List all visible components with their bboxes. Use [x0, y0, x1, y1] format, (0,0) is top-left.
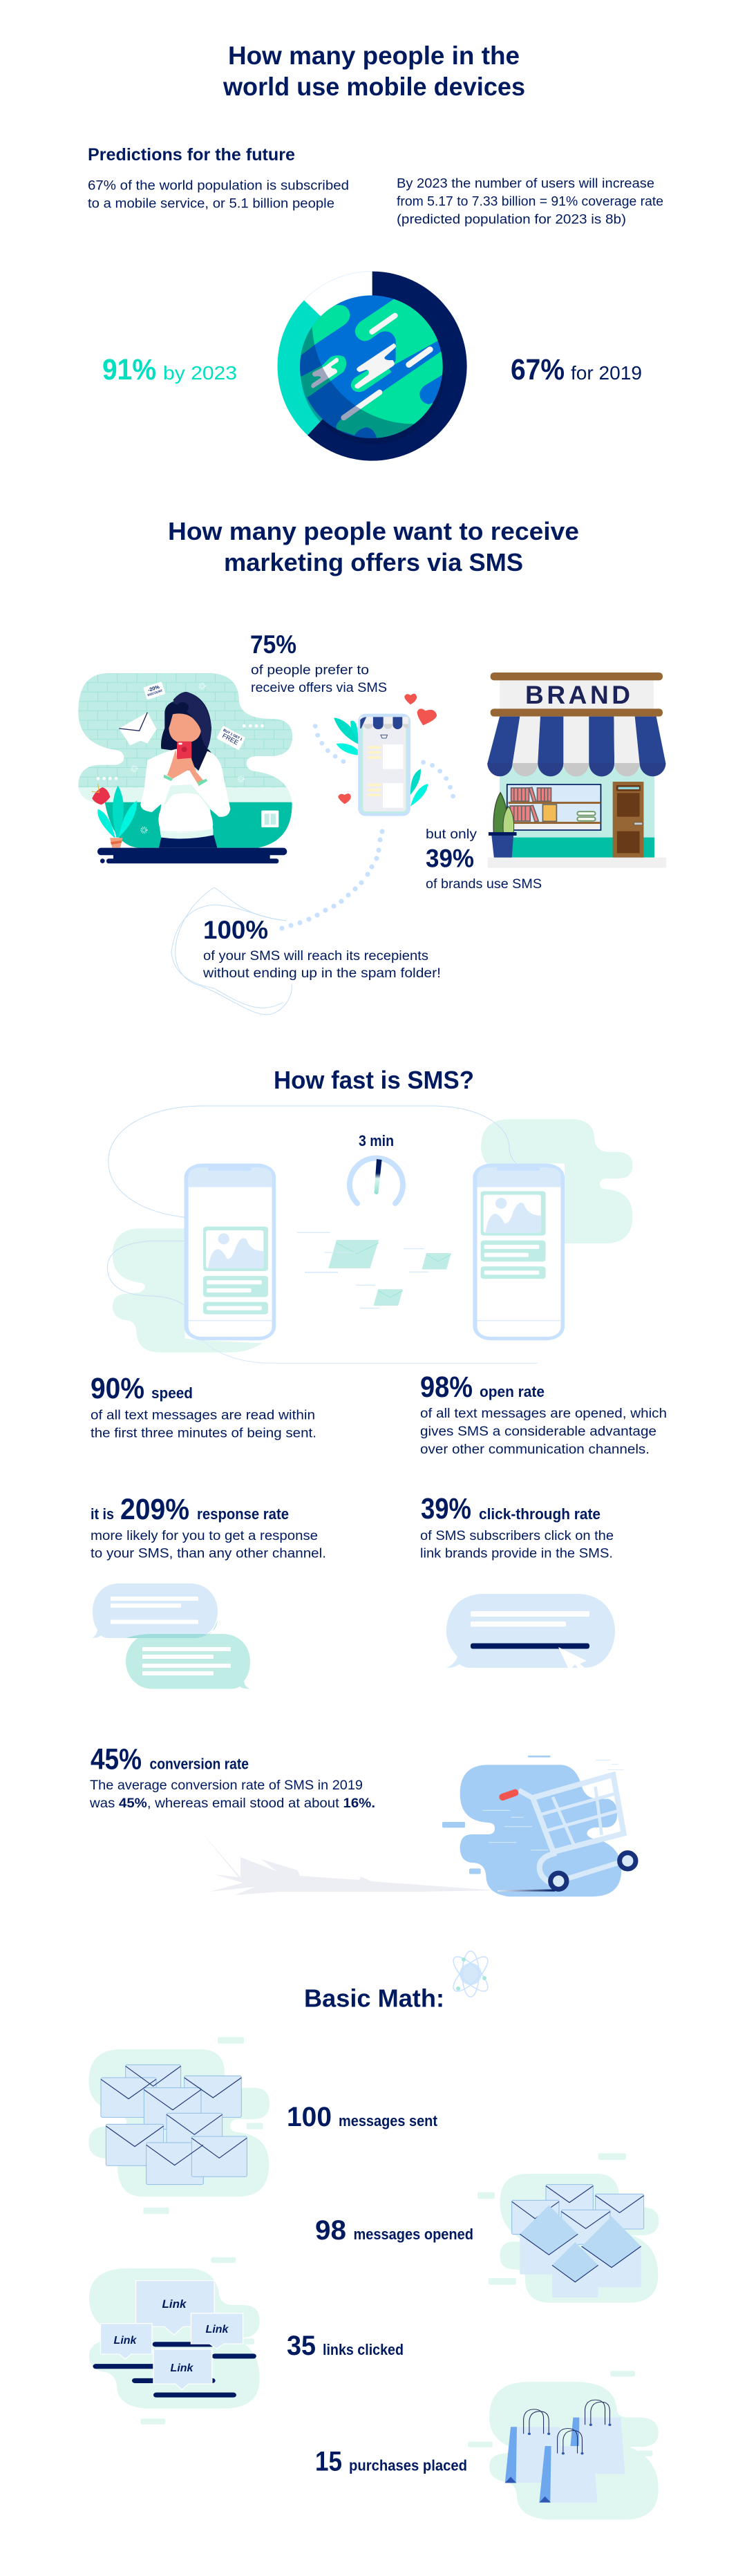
illustration: shopping bags: [468, 2371, 659, 2519]
stat: 209% response rate: more likely for you to get a response: [91, 1529, 318, 1543]
stat: 45% conversion: [89, 1743, 375, 1811]
illustration: links: Link: [162, 2297, 187, 2311]
stat: 98% open rate: of all text messages are opened, which: [420, 1407, 667, 1421]
stat: 90% speed: [91, 1372, 316, 1440]
stat: 45% conversion: The average conversion rate of SMS in 2019: [90, 1778, 363, 1793]
stat: 39% of brands: but only: [426, 827, 477, 842]
stat: 39% of brands: 39%: [426, 845, 474, 872]
stat: 67%: 67%: [511, 353, 565, 386]
stat: 90% speed: the first three minutes of being sent.: [91, 1427, 316, 1440]
text block: subscribers: 67% of the world population is subscribed: [88, 178, 349, 194]
stat: 209% response rate: to your SMS, than any other channel.: [91, 1547, 326, 1561]
stat: 15 purchases placed: 15: [315, 2447, 342, 2477]
title: marketing offers: How many people want to receive: [168, 517, 579, 545]
illustration: links: [89, 2257, 260, 2425]
heading: predictions: Predictions for the future: [88, 145, 295, 164]
text block: increase: from 5.17 to 7.33 billion = 91% coverage rate: [397, 195, 663, 209]
stat: 90% speed: of all text messages are read within: [91, 1409, 315, 1422]
text block: increase: [397, 177, 663, 227]
stat: 39% click-through: click-through rate: [479, 1505, 601, 1523]
stat: 98% open rate: open rate: [480, 1383, 545, 1400]
stat: 98 messages opened: messages opened: [354, 2226, 473, 2243]
stat: 39% of brands: of brands use SMS: [426, 877, 542, 892]
stat: 98% open rate: 98%: [420, 1371, 473, 1404]
stat: 91%: 91%: [102, 353, 156, 386]
illustration: messages sent envelopes: [88, 2037, 270, 2214]
stat: 98% open rate: over other communication channels.: [420, 1442, 650, 1457]
stat: 35 links clicked: links clicked: [323, 2341, 404, 2358]
icon: link bubble with cursor: [446, 1594, 615, 1668]
stat: 45% conversion: 45%: [91, 1743, 142, 1776]
stat: 91%: by 2023: [163, 362, 237, 384]
stat: 100%: without ending up in the spam folder!: [202, 966, 441, 981]
stat: 100 messages sent: 100: [287, 2102, 332, 2132]
illustration: phone shop with hearts: [313, 694, 455, 816]
stat: 35 links clicked: [287, 2331, 404, 2361]
stat: 98 messages opened: 98: [315, 2215, 346, 2246]
stat: 45% conversion: was 45%, whereas email stood at about 16%.: [89, 1796, 375, 1811]
illustration: woman with phone: -20%: [147, 684, 160, 693]
text block: subscribers: to a mobile service, or 5.1 billion people: [88, 196, 334, 211]
wavy outlines: [171, 887, 292, 1015]
stat: 98% open rate: [420, 1371, 667, 1457]
stat: 91%: [102, 353, 237, 386]
illustration: woman with phone: BUY 1 GET 1: [223, 728, 243, 742]
title: how fast: How fast is SMS?: [274, 1066, 474, 1094]
stat: 35 links clicked: 35: [287, 2331, 316, 2361]
title: mobile devices: [223, 41, 525, 101]
illustration: woman with phone: DISCOUNT: [147, 688, 163, 697]
stat: 100 messages sent: [287, 2102, 438, 2132]
stat: 39% click-through: link brands provide in the SMS.: [420, 1547, 613, 1561]
title: marketing offers: marketing offers via SMS: [224, 548, 523, 576]
stat: 15 purchases placed: purchases placed: [349, 2456, 467, 2474]
stat: 75%: 75%: [250, 630, 296, 659]
stat: 75%: [250, 630, 387, 695]
stat: 39% click-through: [420, 1492, 614, 1561]
stat: 39% click-through: 39%: [421, 1492, 471, 1525]
stat: 100 messages sent: messages sent: [339, 2112, 438, 2130]
stat: 39% click-through: of SMS subscribers click on the: [420, 1529, 614, 1543]
store sign text: BRAND: [525, 681, 630, 709]
chart: globe donut: [278, 271, 467, 461]
stat: 39% of brands: [426, 827, 542, 892]
title: mobile devices: world use mobile devices: [223, 73, 525, 101]
text block: increase: (predicted population for 2023 is 8b): [397, 213, 626, 227]
stat: 100%: 100%: [203, 916, 268, 944]
stat: 100%: [202, 916, 441, 981]
icon: chat bubbles: [92, 1583, 250, 1689]
icon: atom: [448, 1951, 493, 1997]
illustration: shopping cart: [442, 1756, 636, 1897]
stat: 98% open rate: gives SMS a considerable advantage: [420, 1425, 656, 1439]
stat: 90% speed: 90%: [91, 1372, 144, 1405]
stat: 67%: for 2019: [571, 362, 642, 384]
stat: 15 purchases placed: [315, 2447, 467, 2477]
illustration: links: Link: [114, 2335, 138, 2347]
stat: 209% response rate: it is: [91, 1505, 114, 1523]
stat: 209% response rate: response rate: [197, 1505, 289, 1523]
illustration: opened envelopes: [477, 2153, 659, 2303]
stat: 67%: [511, 353, 642, 386]
chart: 3 min gauge: [350, 1132, 403, 1203]
stat: 90% speed: speed: [151, 1384, 193, 1402]
illustration: dust trail: [200, 1831, 495, 1895]
illustration: woman with phone: [76, 670, 295, 863]
title: marketing offers: [168, 517, 579, 576]
dotted trail: [279, 829, 385, 931]
text block: subscribers: [88, 178, 349, 211]
stat: 100%: of your SMS will reach its recepients: [203, 949, 428, 963]
illustration: woman with phone: FREE: [221, 732, 240, 746]
title: basic math: Basic Math:: [304, 1984, 444, 2013]
illustration: links: Link: [171, 2362, 194, 2374]
illustration: phones sending messages: [107, 1106, 633, 1363]
illustration: links: Link: [206, 2324, 229, 2335]
stat: 75%: of people prefer to: [251, 664, 369, 677]
stat: 45% conversion: conversion rate: [149, 1756, 249, 1772]
text block: increase: By 2023 the number of users will increase: [397, 177, 654, 191]
stat: 209% response rate: 209%: [120, 1493, 189, 1526]
title: mobile devices: How many people in the: [228, 41, 520, 70]
illustration: brand store: [487, 673, 666, 868]
stat: 75%: receive offers via SMS: [251, 681, 387, 695]
stat: 98 messages opened: [315, 2215, 473, 2246]
stat: 209% response rate: [91, 1493, 326, 1561]
chart: 3 min gauge: 3 min: [359, 1132, 394, 1149]
